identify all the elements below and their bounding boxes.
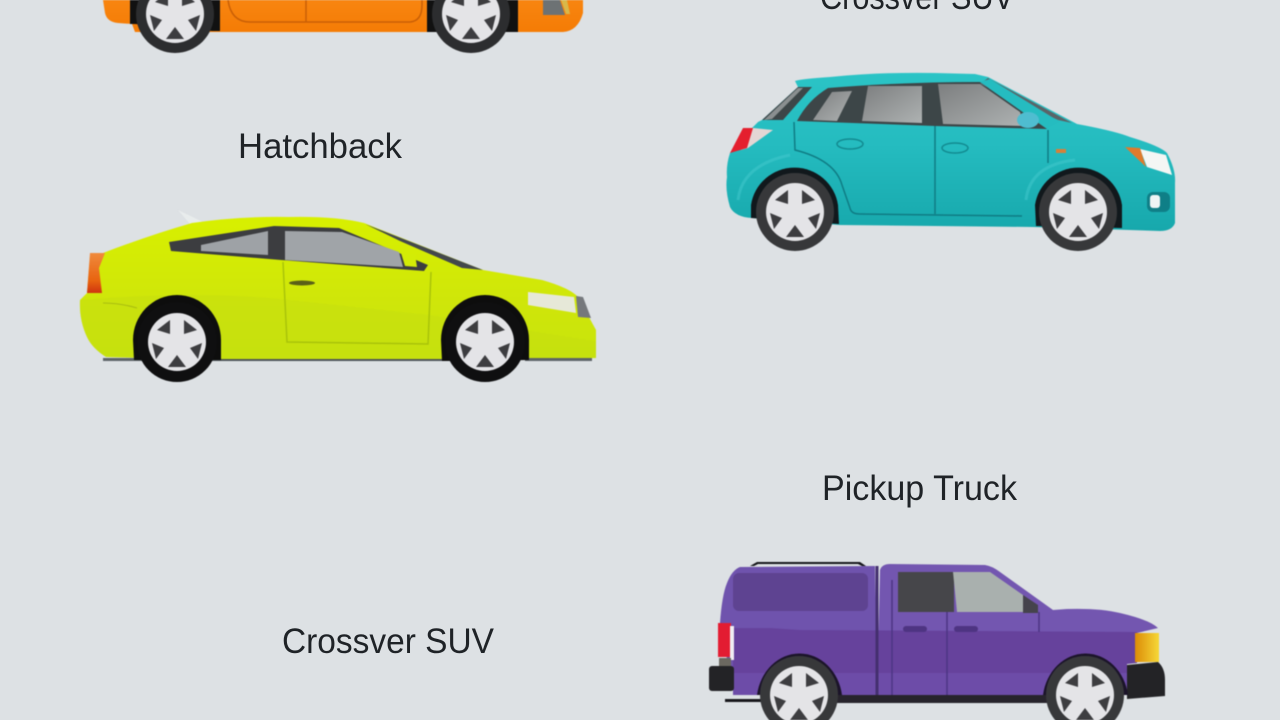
label: bottom Crossver SUV: Crossver SUV bbox=[282, 622, 495, 661]
vehicle: teal hatchback bbox=[726, 73, 1175, 251]
vehicle: purple pickup truck bbox=[709, 562, 1165, 720]
label: Hatchback: Hatchback bbox=[238, 127, 402, 166]
vehicle: lime coupe bbox=[80, 210, 600, 382]
vehicle: orange car, cropped at top bbox=[103, 0, 583, 53]
label: Pickup Truck: Pickup Truck bbox=[822, 469, 1017, 508]
